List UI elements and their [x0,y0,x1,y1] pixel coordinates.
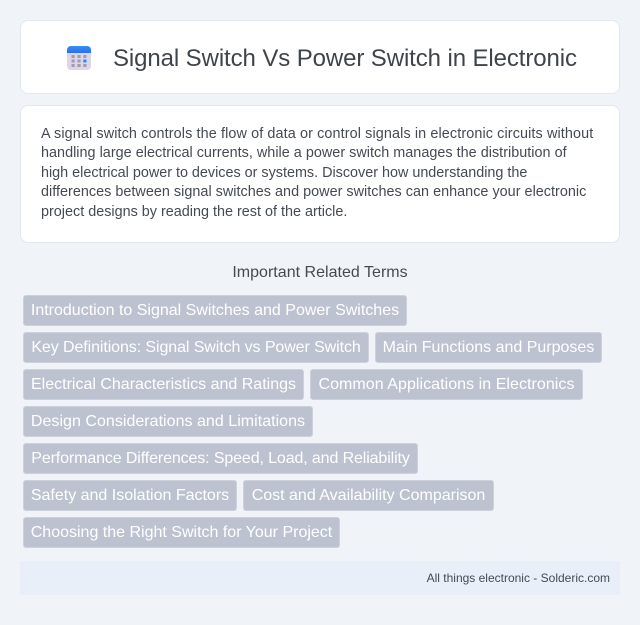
panel: intro text [20,105,620,243]
tag [23,517,340,548]
tag: Choosing the Right Switch for Your Project [31,524,332,541]
tag [243,480,494,511]
tag [23,332,369,363]
tag: Main Functions and Purposes [383,339,594,356]
tag: Common Applications in Electronics [318,376,575,393]
intro paragraph [41,126,594,220]
tag [23,406,313,437]
tag: Cost and Availability Comparison [252,487,485,504]
tag [310,369,583,400]
tag [23,480,237,511]
tag [23,443,418,474]
icon: calendar [67,46,91,70]
tag [375,332,602,363]
tag [23,369,304,400]
footer: All things electronic - Solderic.com [427,571,610,585]
intro paragraph: high electrical power to devices or systems. Discover how understanding the [41,164,527,180]
intro paragraph: project designs by reading the rest of the article. [41,204,347,220]
title: Signal Switch Vs Power Switch in Electronic [113,45,577,72]
tag: Design Considerations and Limitations [31,413,305,430]
footer [20,561,620,595]
tag: Key Definitions: Signal Switch vs Power Switch [31,339,361,356]
tag: Introduction to Signal Switches and Power Switches [31,302,399,319]
intro paragraph: A signal switch controls the flow of data or control signals in electronic circuits without [41,126,593,142]
tag: Safety and Isolation Factors [31,487,229,504]
tag: Electrical Characteristics and Ratings [31,376,296,393]
tag: Performance Differences: Speed, Load, and Reliability [31,450,410,467]
intro paragraph: differences between signal switches and power switches can enhance your electronic [41,184,586,200]
intro paragraph: handling large electrical currents, while a power switch manages the distribution of [41,145,567,161]
tag [23,295,407,326]
panel: header [20,20,620,94]
heading: related terms: Important Related Terms [232,264,408,281]
